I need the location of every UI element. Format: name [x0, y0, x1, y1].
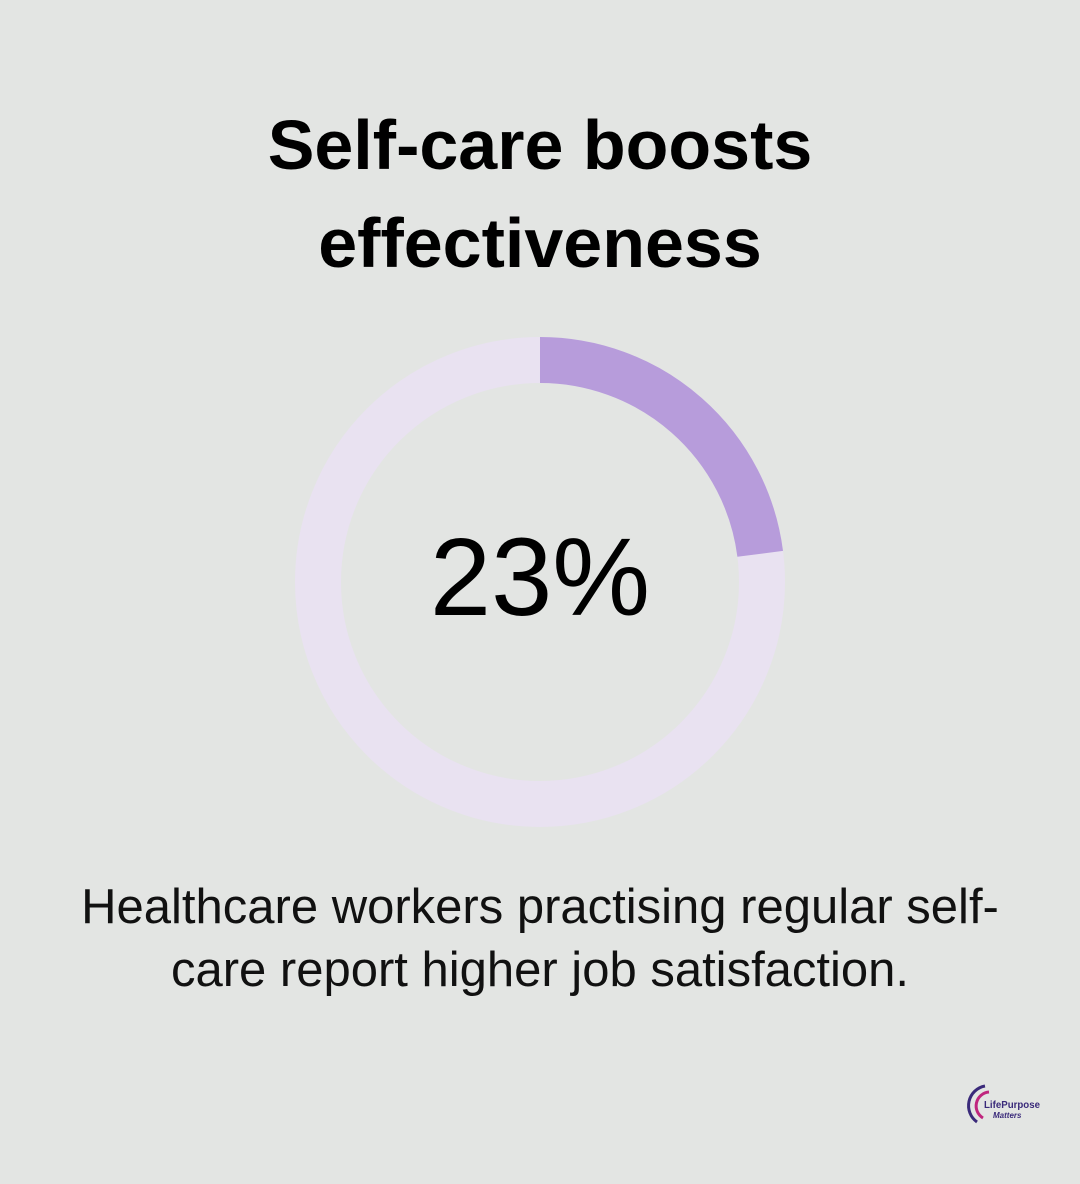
title: effectiveness — [318, 204, 762, 282]
title: Self-care boosts — [268, 106, 812, 184]
percentage: 23% — [430, 516, 650, 639]
arc: 23% — [540, 360, 760, 554]
caption — [81, 880, 999, 997]
logo: Matters — [993, 1111, 1022, 1120]
logo: LifePurpose — [984, 1100, 1040, 1111]
caption: Healthcare workers practising regular self- — [81, 880, 999, 934]
logo — [967, 1084, 1040, 1124]
title — [268, 106, 812, 282]
caption: care report higher job satisfaction. — [171, 943, 909, 997]
